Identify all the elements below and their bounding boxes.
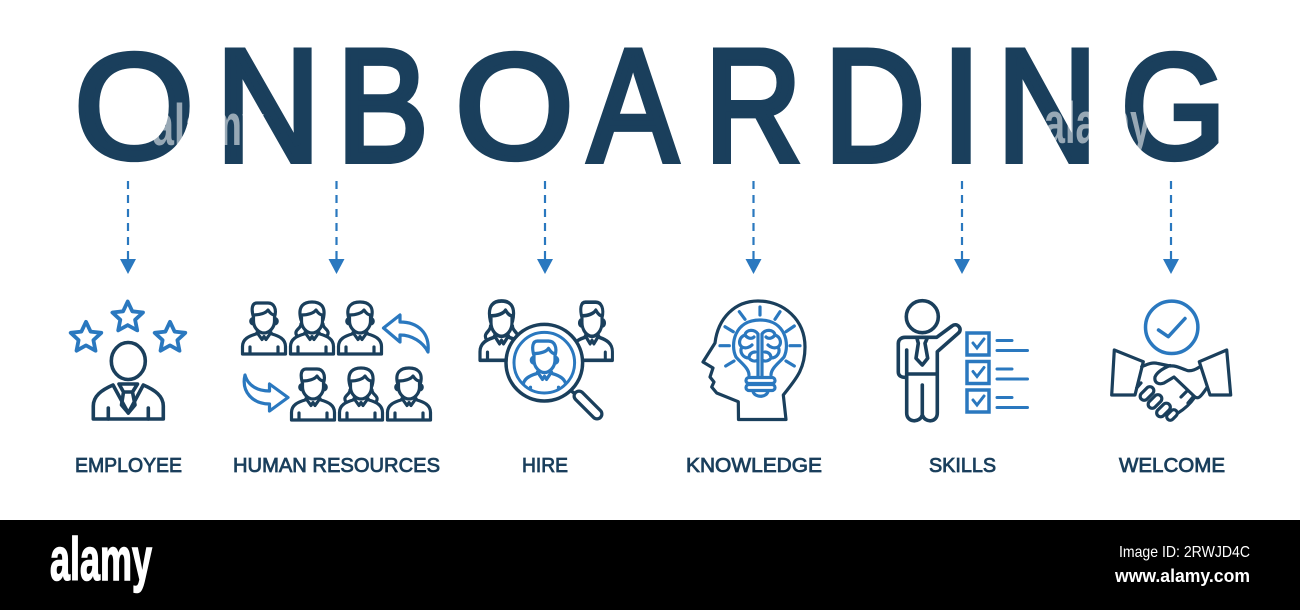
title: ONBOARDING: R (705, 17, 802, 195)
arrow: hire (537, 181, 553, 274)
title: ONBOARDING: G (1121, 25, 1226, 190)
website: www.alamy.com (1114, 566, 1250, 586)
title: ONBOARDING: O (455, 23, 574, 189)
footer logo: alamy (50, 526, 152, 593)
icon: employee with stars (71, 302, 185, 419)
title: ONBOARDING: B (337, 16, 428, 195)
candidates (480, 301, 612, 360)
checklist (967, 333, 1028, 412)
arrow: skills (954, 181, 970, 274)
person (93, 342, 163, 419)
check badge (1146, 301, 1198, 353)
icon: skills (898, 301, 1028, 421)
title: ONBOARDING: N (216, 17, 320, 195)
title: ONBOARDING (74, 16, 1226, 196)
label: human resources: HUMAN RESOURCES (233, 455, 440, 477)
title: ONBOARDING: O (74, 24, 194, 190)
watermark over title left: alamy (152, 93, 264, 158)
title: ONBOARDING: N (997, 16, 1097, 195)
icon: knowledge head with bulb (703, 301, 805, 420)
arrow: human resources (328, 181, 344, 274)
handshake (1112, 350, 1231, 422)
arrow: curved left (384, 315, 428, 352)
bottom row people (292, 368, 430, 420)
rays (720, 307, 800, 366)
top row people (242, 302, 382, 354)
title: ONBOARDING: I (942, 16, 981, 195)
light bulb (734, 320, 786, 396)
arrow: employee (120, 181, 136, 274)
brain (740, 330, 780, 376)
title: ONBOARDING: D (824, 16, 925, 195)
arrow: welcome (1163, 181, 1179, 274)
watermark over title right: alamy (1044, 91, 1151, 156)
label: hire: HIRE (522, 455, 568, 477)
label: skills: SKILLS (929, 455, 996, 477)
label: knowledge: KNOWLEDGE (686, 455, 822, 477)
image id: Image ID: 2RWJD4C (1119, 544, 1250, 561)
arrow: curved right (244, 375, 288, 411)
head (703, 301, 805, 420)
stars (71, 302, 185, 351)
arrow: knowledge (746, 181, 762, 274)
magnifying glass (506, 324, 597, 414)
presenter (898, 301, 960, 421)
icon: welcome handshake (1112, 301, 1231, 422)
icon: human resources (242, 302, 430, 420)
label: employee: EMPLOYEE (75, 455, 182, 477)
title: ONBOARDING: A (588, 17, 677, 196)
label: welcome: WELCOME (1119, 455, 1225, 477)
icon: hire magnifier (480, 301, 612, 414)
footer bar (0, 520, 1300, 610)
